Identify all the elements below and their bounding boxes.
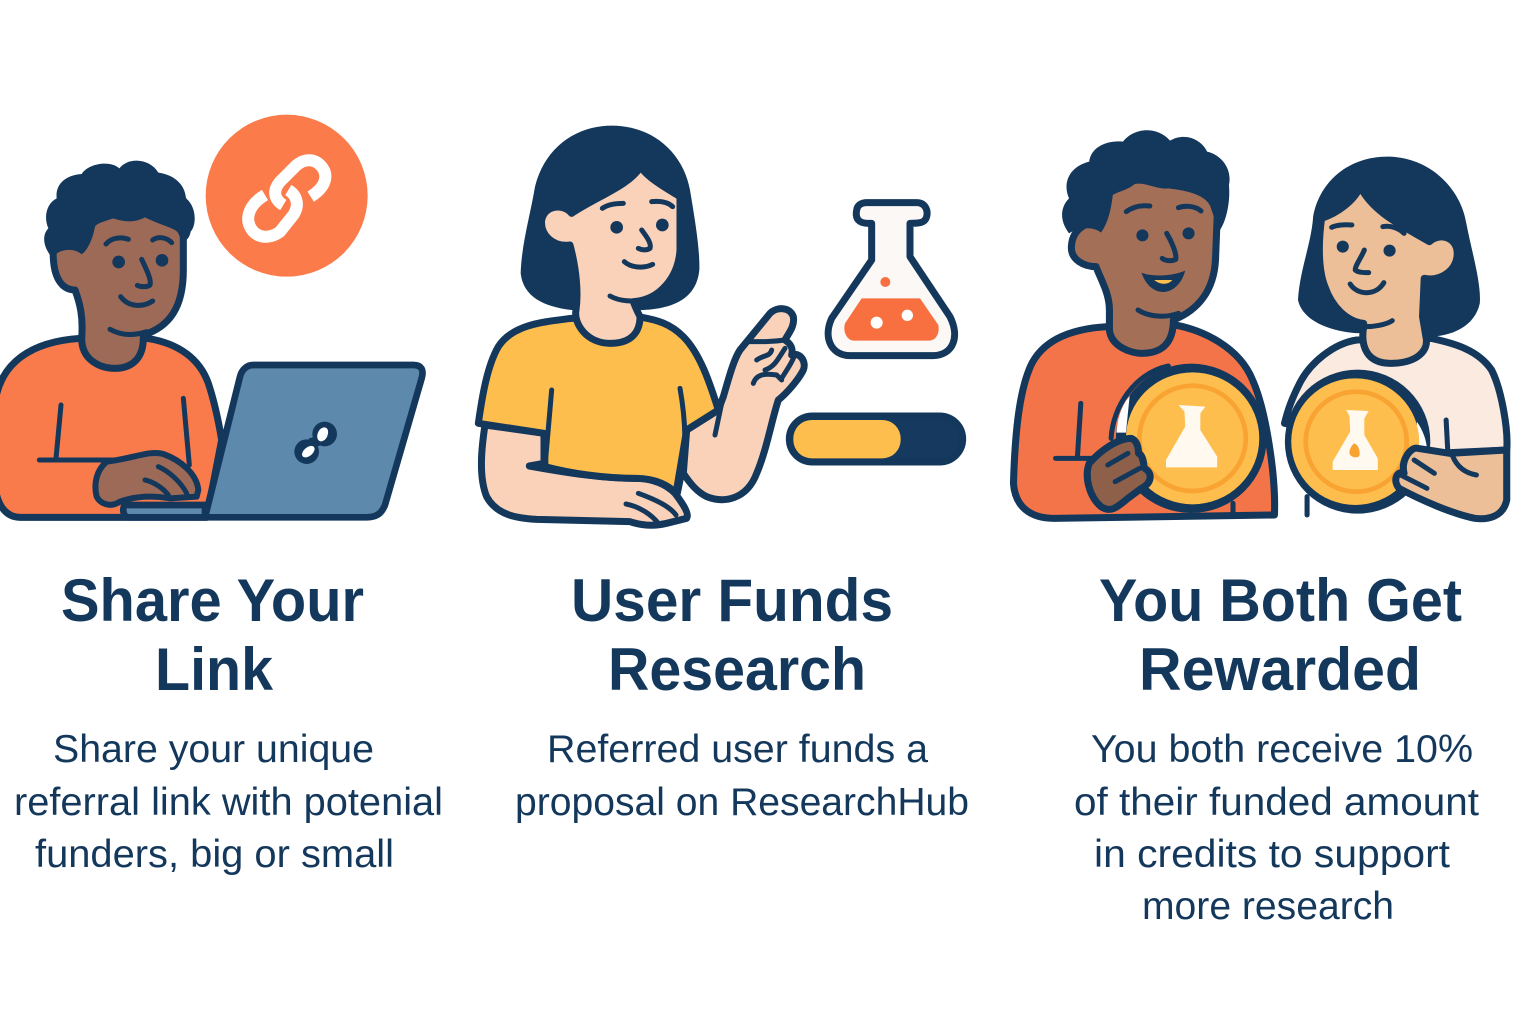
text: you both get rewarded description: of their funded amount <box>1074 781 1479 824</box>
text: share your link description: funders, big or small <box>35 833 394 876</box>
heading: user funds research: Research <box>608 636 866 703</box>
person: head and neck <box>53 200 183 368</box>
person two: face features <box>1332 225 1404 327</box>
heading: you both get rewarded <box>1099 567 1462 703</box>
person: torso <box>0 338 222 517</box>
person: yellow shirt <box>478 317 718 493</box>
person: hair <box>521 126 699 310</box>
person two: hair <box>1298 157 1480 337</box>
person two: gold coin <box>1285 370 1430 515</box>
text: share your link description: referral link with potenial <box>14 781 443 824</box>
text: share your link description <box>14 728 443 876</box>
text: you both get rewarded description: You both receive 10% <box>1091 728 1473 771</box>
icon: lab flask <box>828 203 955 356</box>
text: user funds research description: Referred user funds a <box>547 728 928 771</box>
laptop <box>123 365 423 517</box>
person: raised arm and pointing hand <box>683 309 804 500</box>
text: you both get rewarded description: more research <box>1142 885 1394 928</box>
text: you both get rewarded description <box>1074 728 1479 928</box>
person one: head and neck <box>1071 173 1219 353</box>
illustration: person pointing at flask and progress bar <box>478 126 963 525</box>
text: share your link description: Share your unique <box>53 728 374 771</box>
panel: share your link <box>0 115 443 876</box>
person one: orange torso <box>1013 325 1275 518</box>
text: you both get rewarded description: in credits to support <box>1094 833 1450 876</box>
heading: you both get rewarded: Rewarded <box>1139 636 1421 703</box>
person one: arm line <box>1056 403 1094 458</box>
icon: orange link badge <box>206 115 368 277</box>
text: user funds research description: proposal on ResearchHub <box>515 781 969 824</box>
heading: share your link: Link <box>155 636 274 703</box>
person one: hand on coin <box>1087 438 1150 509</box>
person: face and detail lines <box>529 201 794 523</box>
heading: you both get rewarded: You Both Get <box>1099 567 1462 634</box>
person two: head and neck <box>1319 187 1457 363</box>
person one: curly hair <box>1062 130 1230 233</box>
heading: user funds research <box>571 567 893 703</box>
panel: user funds research <box>478 126 969 824</box>
person one: gold coin <box>1111 364 1267 515</box>
person: sleeve lines <box>39 398 189 465</box>
heading: share your link <box>61 567 364 703</box>
progress bar <box>789 416 963 462</box>
person: hand on keyboard <box>95 453 198 505</box>
panel: you both get rewarded <box>1013 130 1507 928</box>
person one: face features <box>1126 206 1201 316</box>
illustration: person at laptop sharing a link <box>0 115 423 517</box>
illustration: two people holding coins <box>1013 130 1507 519</box>
person: head and neck <box>542 167 680 343</box>
text: user funds research description <box>515 728 969 824</box>
person two: arm and hand <box>1396 420 1507 519</box>
heading: share your link: Share Your <box>61 567 364 634</box>
person two: pale shirt <box>1285 338 1507 453</box>
person: curly hair <box>44 161 195 255</box>
person: face features <box>106 238 172 335</box>
heading: user funds research: User Funds <box>571 567 893 634</box>
person: resting arm <box>481 425 687 525</box>
